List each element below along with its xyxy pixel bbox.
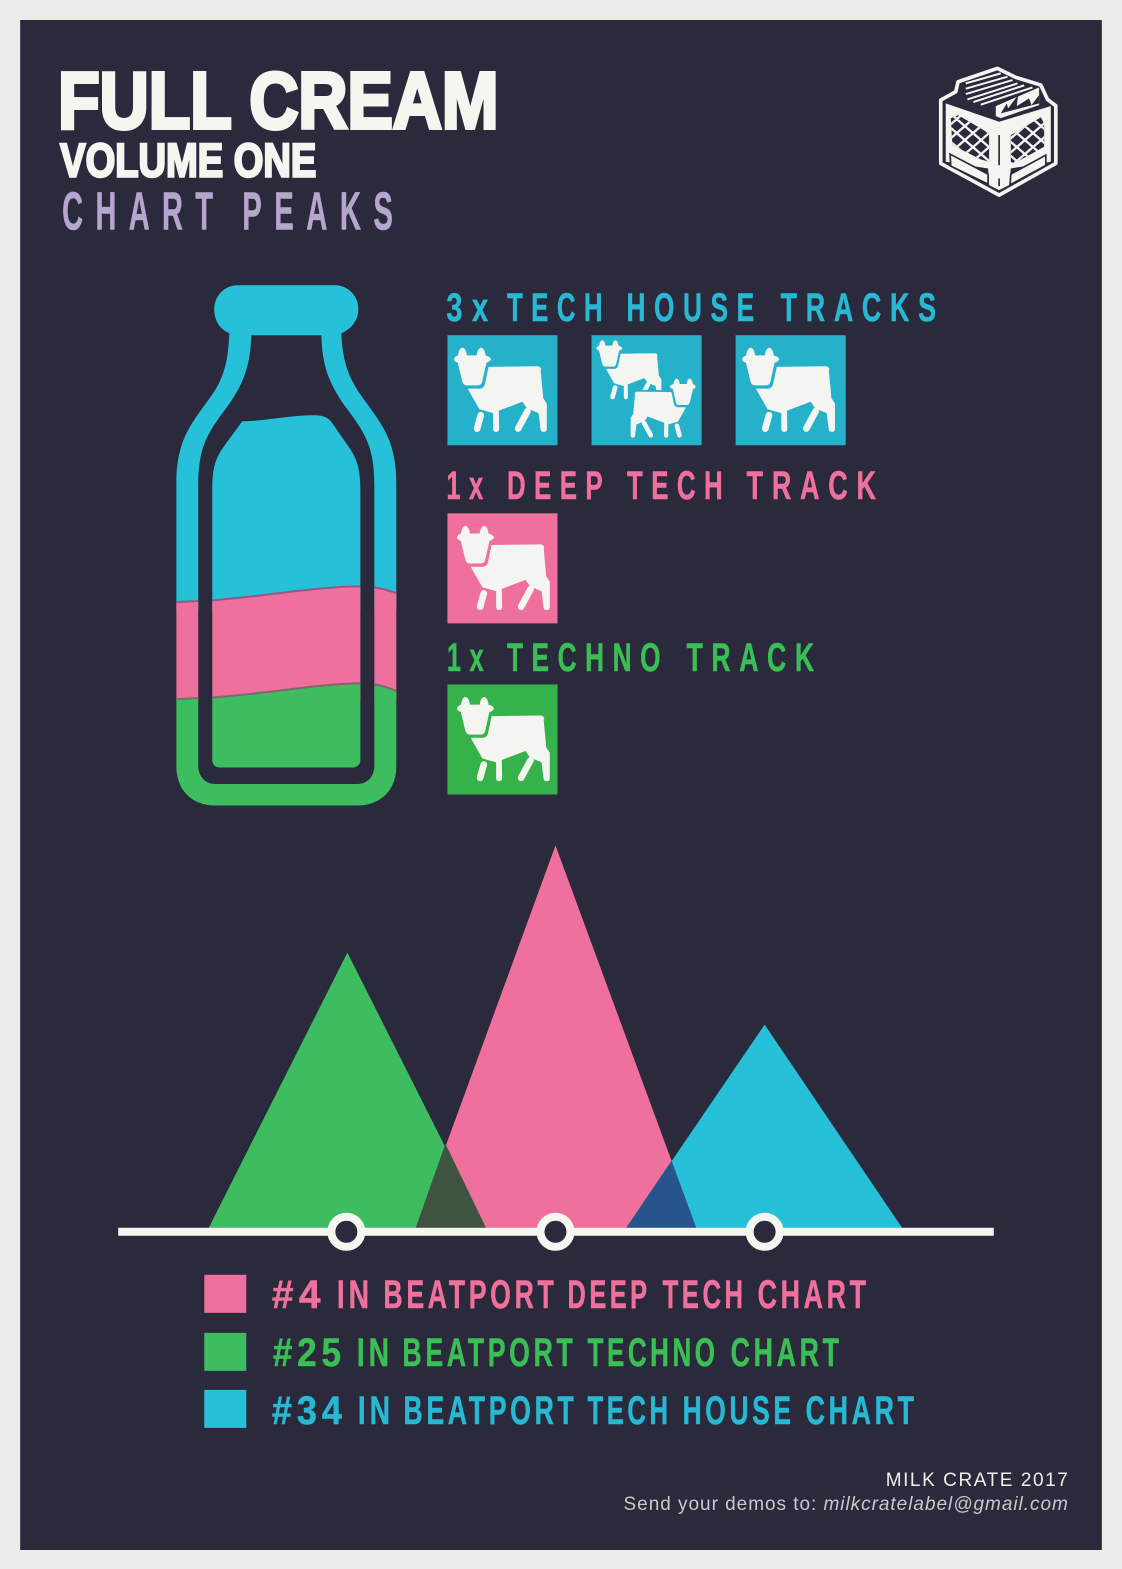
peak: techno [208, 953, 486, 1229]
legend text: techno: #25 [273, 1331, 346, 1375]
heading: deep tech track: DEEP [507, 464, 611, 508]
tile: tech house two cows [592, 335, 702, 445]
bottle chart [170, 280, 402, 811]
legend text: tech house: BEATPORT [403, 1389, 578, 1433]
legend text: techno: TECHNO [588, 1331, 719, 1375]
heading: techno track [447, 636, 823, 680]
overlap: techno and deep tech [415, 1144, 486, 1229]
legend text: tech house: CHART [806, 1389, 918, 1433]
footer: demos line: Send your demos to: milkcratelabel@gmail.com [624, 1494, 1068, 1515]
legend text: techno [273, 1331, 843, 1375]
legend text: tech house: TECH [588, 1389, 672, 1433]
title: full cream: FULL CREAM [58, 56, 498, 145]
axis [118, 1228, 994, 1236]
heading: tech house tracks: TECH [507, 286, 611, 330]
heading: tech house tracks: TRACKS [781, 286, 945, 330]
tile: techno cow [447, 684, 557, 795]
bottle green layer [170, 683, 400, 811]
subtitle: chart peaks: CHART [62, 182, 225, 242]
legend text: tech house: IN [358, 1389, 394, 1433]
legend text: techno: CHART [731, 1331, 843, 1375]
legend text: deep tech: BEATPORT [383, 1273, 557, 1317]
heading: deep tech track: TRACK [747, 464, 885, 508]
heading: deep tech track: TECH [627, 464, 731, 508]
legend text: deep tech: DEEP [568, 1273, 651, 1317]
subtitle: chart peaks: PEAKS [242, 182, 405, 242]
legend text: tech house [272, 1389, 918, 1433]
legend text: techno: BEATPORT [402, 1331, 577, 1375]
legend swatch: deep tech [204, 1275, 246, 1313]
legend text: tech house: HOUSE [683, 1389, 795, 1433]
heading: techno track: TRACK [687, 636, 823, 680]
legend text: deep tech [272, 1273, 870, 1317]
bottle blue layer [170, 280, 402, 610]
legend text: deep tech: #4 [272, 1273, 326, 1317]
legend [204, 1273, 918, 1433]
legend text: deep tech: CHART [758, 1273, 870, 1317]
bottle pink layer [170, 586, 400, 700]
marker: #4 [540, 1217, 571, 1247]
footer: credit: MILK CRATE 2017 [886, 1470, 1068, 1491]
legend text: tech house: #34 [272, 1389, 347, 1433]
tile: tech house cow 1 [447, 335, 557, 445]
subtitle: volume one: VOLUME ONE [60, 134, 316, 187]
heading: techno track: 1x [447, 636, 492, 680]
marker: #25 [331, 1217, 361, 1247]
tile: deep tech cow [447, 513, 557, 623]
heading: tech house tracks: HOUSE [627, 286, 763, 330]
heading: deep tech track [446, 464, 885, 508]
heading: techno track: TECHNO [507, 636, 669, 680]
heading: deep tech track: 1x [446, 464, 491, 508]
tile: tech house cow 3 [736, 335, 846, 445]
overlap: deep tech and tech house [626, 1161, 697, 1229]
peaks chart [118, 846, 994, 1247]
peak: tech house [626, 1025, 903, 1229]
peak: deep tech [415, 846, 697, 1229]
legend swatch: tech house [204, 1390, 246, 1428]
marker: #34 [750, 1217, 780, 1247]
heading: tech house tracks: 3x [446, 286, 497, 330]
legend text: techno: IN [357, 1331, 393, 1375]
legend swatch: techno [204, 1333, 246, 1371]
legend text: deep tech: TECH [663, 1273, 747, 1317]
heading: tech house tracks [446, 286, 945, 330]
legend text: deep tech: IN [337, 1273, 373, 1317]
icon: milk crate logo [941, 68, 1056, 200]
